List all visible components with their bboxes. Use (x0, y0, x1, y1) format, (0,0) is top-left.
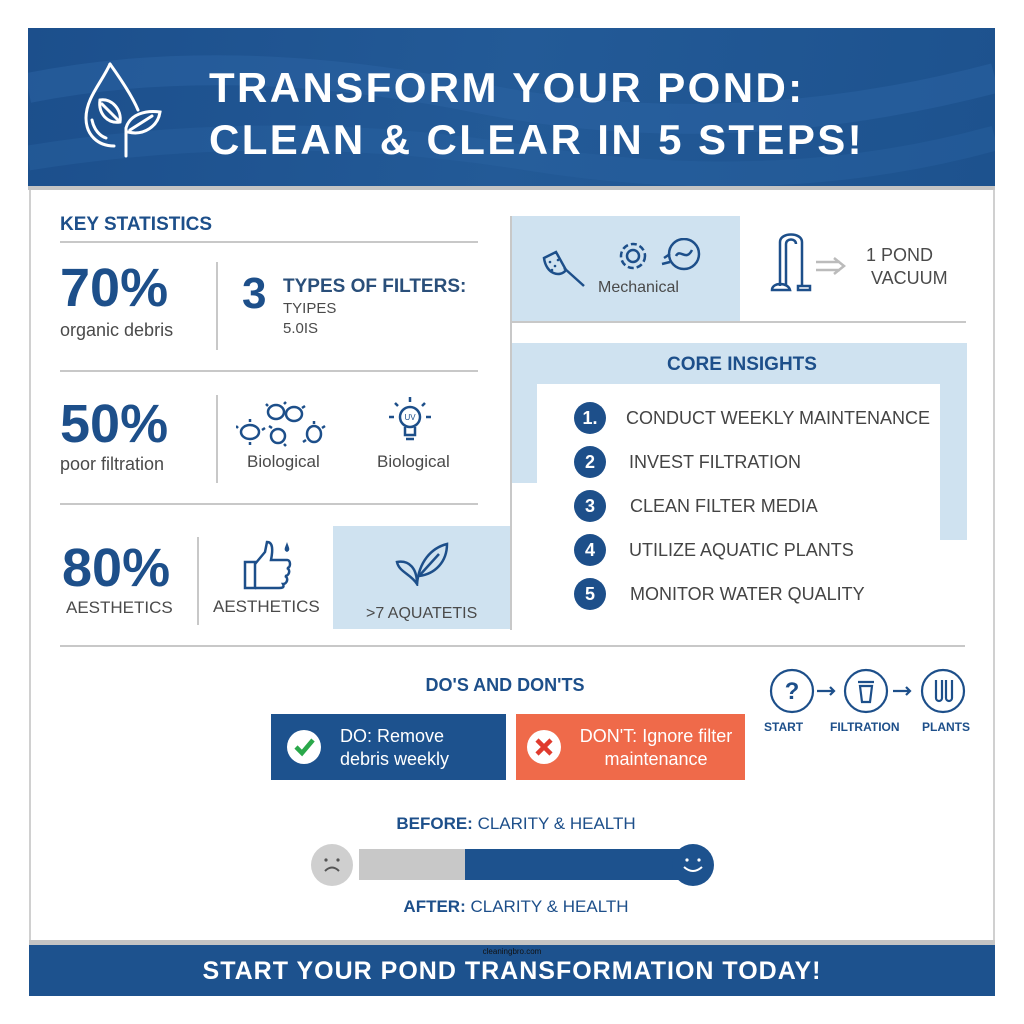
icon: net (542, 250, 585, 287)
icon: thumbs up aesthetics (213, 540, 320, 616)
icon: uv bulb biological: Biological (377, 452, 450, 471)
icon: bacteria biological (236, 401, 326, 471)
list: insights: 1. (582, 408, 598, 428)
header banner (28, 28, 995, 186)
text: 1 pond vacuum: 1 POND (866, 245, 933, 265)
flow: start filtration plants: START (764, 720, 803, 734)
list: insights: 3 (585, 496, 595, 516)
icon: drop with leaves (84, 62, 162, 158)
icon: uv bulb biological (377, 397, 450, 471)
heading: core insights: CORE INSIGHTS (667, 354, 817, 375)
chart: before after progress bar (311, 844, 714, 886)
stat: 80%: AESTHETICS (66, 598, 173, 617)
list: insights: CLEAN FILTER MEDIA (630, 496, 818, 516)
text: 1 pond vacuum (866, 245, 948, 288)
flow: start filtration plants (764, 668, 970, 734)
stat: 70%: 70% (60, 258, 168, 318)
label: before: BEFORE: CLARITY & HEALTH (396, 814, 636, 833)
stat: 3 types of filters: TYPES OF FILTERS: (283, 276, 466, 297)
content card border (29, 190, 995, 942)
list: insights: MONITOR WATER QUALITY (630, 584, 865, 604)
stat: 50%: 50% (60, 394, 168, 454)
callout: dont box: maintenance (604, 749, 708, 769)
list: insights: 4 (585, 540, 595, 560)
stat: 70%: organic debris (60, 320, 173, 340)
callout: do box: debris weekly (340, 749, 449, 769)
callout: aquatic plants box: >7 AQUATETIS (366, 605, 477, 622)
list: insights: UTILIZE AQUATIC PLANTS (629, 540, 854, 560)
stat: 80%: 80% (62, 538, 170, 598)
stat: 3 types of filters: 3 (242, 269, 266, 318)
icon: thumbs up aesthetics: AESTHETICS (213, 597, 320, 616)
flow: start filtration plants: PLANTS (922, 720, 970, 734)
flow: start filtration plants: FILTRATION (830, 720, 900, 734)
stat: 3 types of filters: TYIPES (283, 300, 336, 317)
stat: 70% (60, 258, 173, 340)
title (209, 64, 864, 163)
title: TRANSFORM YOUR POND: (209, 64, 805, 111)
stat: 3 types of filters: 5.0IS (283, 320, 318, 337)
footer banner (29, 945, 995, 996)
title: CLEAN & CLEAR IN 5 STEPS! (209, 116, 864, 163)
icon: uv bulb biological: UV (404, 413, 416, 422)
footer banner: cleaningbro.com (483, 947, 541, 956)
footer banner: START YOUR POND TRANSFORMATION TODAY! (203, 957, 821, 985)
panel: key statistics (60, 214, 510, 629)
callout: dont box (516, 714, 745, 780)
flow: start filtration plants: ? (785, 678, 799, 705)
callout: do box (271, 714, 506, 780)
callout: dont box: DON'T: Ignore filter (580, 726, 732, 746)
list: insights: 2 (585, 452, 595, 472)
label: after: AFTER: CLARITY & HEALTH (403, 897, 629, 916)
panel: mechanical filter: Mechanical (598, 279, 679, 296)
text: 1 pond vacuum: VACUUM (871, 268, 948, 288)
list: insights (574, 402, 930, 610)
icon: gear and microbe (620, 238, 700, 270)
callout: do box: DO: Remove (340, 726, 444, 746)
stat: 3 types of filters (242, 269, 466, 337)
icon: bacteria biological: Biological (247, 452, 320, 471)
panel: core insights (512, 343, 967, 540)
panel: mechanical filter (512, 216, 740, 322)
list: insights: INVEST FILTRATION (629, 452, 801, 472)
callout: aquatic plants box (333, 526, 511, 629)
stat: 50%: poor filtration (60, 454, 164, 474)
icon: vacuum with arrow (770, 233, 846, 292)
list: insights: CONDUCT WEEKLY MAINTENANCE (626, 408, 930, 428)
list: insights: 5 (585, 584, 595, 604)
heading: key statistics: KEY STATISTICS (60, 214, 212, 235)
heading: dos and donts: DO'S AND DON'TS (426, 675, 584, 695)
